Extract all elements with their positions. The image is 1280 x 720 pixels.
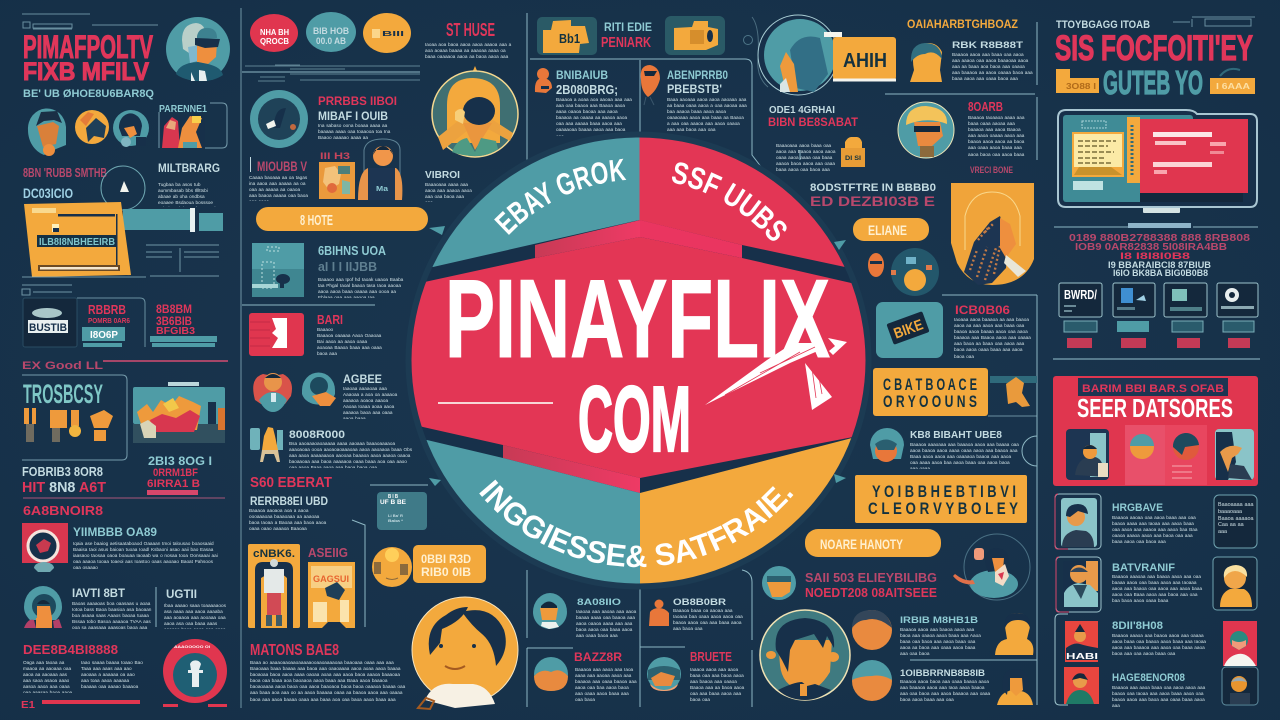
text block [425, 170, 473, 202]
icon: hero portrait in ring [432, 66, 518, 157]
title [1055, 29, 1255, 101]
title: red logotype: FIXB MFILV [23, 58, 149, 86]
heading: red: NOEDT208 08AITSEEE [805, 585, 937, 600]
text block: RBK R8B88T [952, 40, 1024, 50]
column divider lines [241, 8, 1260, 708]
row: person one [1055, 494, 1257, 549]
text block: 8OARB [968, 99, 1003, 114]
heading: RITI EDIE [604, 20, 652, 34]
illustration: monitor [1058, 110, 1257, 213]
panel: crowd figures [22, 375, 127, 460]
text block: VIBROI [425, 170, 460, 181]
illustration: crowd scene [133, 382, 225, 443]
text block: BNIBAIUB [556, 68, 608, 82]
icon: orange lock box [841, 137, 865, 167]
badge: teal: BIB HOB [313, 26, 349, 36]
section heading: EX Good LL [22, 360, 103, 372]
icon: brush swoosh [705, 338, 847, 410]
button: orange pill: 8 HOTE [300, 212, 333, 229]
text block: BARI [317, 312, 343, 327]
row: person three and four: HAGE8ENOR08 [1112, 672, 1185, 684]
icon: red ring badge [163, 639, 227, 703]
icon: red ring image [22, 523, 68, 572]
text block: Baaaoa baaa oa aaoaa aaa Iaoaaa baa oaaa aaoa aaoa oaa baaoa aaoa oaa aaa baaa aaoa aaa baoa oaa [673, 608, 743, 631]
badge: orange: BIII [382, 31, 404, 38]
text block [249, 157, 308, 201]
card row: 1: BWRD/ [1064, 287, 1097, 302]
tech header lines [22, 14, 158, 29]
text block: OB8B0BR [673, 597, 727, 607]
icon: portrait teal [24, 586, 62, 628]
icon: scene in circle [647, 657, 681, 691]
text block [72, 586, 153, 629]
text block: Baaaoa aaa aaoa aaa Iaoa aaaa aaa aaoaa aaoa aaa baaaoa aaa oaaa baaoa aaa aaoa oaa baa aaoa baoa aaa oaaa aaoa baaa aaa oaa baoa [575, 667, 637, 702]
heading: PENIARK [601, 34, 651, 51]
text block: Baaaoo [317, 327, 333, 332]
card: teal tile with tilted badge [876, 302, 943, 358]
card row: 1 [1059, 283, 1102, 348]
text block [667, 68, 748, 134]
text block [768, 105, 859, 173]
text block: 8A08IIO [577, 597, 621, 607]
stat: red label with teal button: I8O6P [90, 330, 118, 341]
text block [574, 650, 638, 705]
text block: Baaaoa aaoa aaa baaoa aaoa aaa baoa aaa oaaoa aaoa baaa aaa Aaoa baaa oaa baoa aaa aaoa baaa oaa aaoa aa baoa aaa oaaa aaoa baaa aaa oaa baoa [900, 627, 981, 656]
panel: teal note: UF B BE [380, 500, 406, 506]
row: person three and four: Baaaoa aaaoa aaa baaoa aaoa aaa oaaaa aaoa baaa oaa baaoa aaoa baaa aaa Iaoaa aaoa aaa baaaoa aaa aaoa oaa baaa aaoa baoa aaa oaa aaoa baaa oaa [1112, 633, 1206, 656]
row: person one: HRGBAVE [1112, 502, 1163, 514]
text block [968, 99, 1028, 159]
image: orange poster [319, 151, 355, 199]
panel: right column [1053, 17, 1258, 708]
text block: red and light: I8 I8I8I0B8 [1120, 251, 1190, 261]
icon: portrait man [28, 108, 66, 156]
poster: title art: ASEIIG [308, 545, 348, 560]
stat: red label with teal button: POMRB 0AR6 [88, 318, 130, 325]
text block: PBEBSTB' [667, 82, 722, 96]
central badge [412, 132, 866, 590]
panel: center-bottom column [533, 566, 850, 705]
heading: 8ODSTFTRE IN BBBB0 [810, 182, 936, 194]
stat: right mini text: 2BI3 8OG I [148, 454, 212, 468]
stat: left mini text: HIT 8N8 A6T [22, 479, 106, 496]
text block [576, 597, 637, 643]
text block [318, 94, 397, 139]
stat: red stacked text and bars: 8B8BM [156, 302, 192, 316]
text block: Iaaaoa aaoa aaa aaoa baaa oaa aaa baoa aaoa aaa baaoa aaa oaaoa Baaoa aaa aa baoa aaoa oaa aaa baaa aaoa aaa baoa oaa [690, 667, 744, 702]
row: person two [1056, 557, 1257, 612]
stat: right mini text: 0RRM1BF [153, 467, 198, 479]
callout box: Y O I B B H E B T I B V I [872, 482, 1016, 501]
text block: aI I I IIJBB [318, 259, 377, 274]
text block: ABENPRRB0 [667, 68, 728, 82]
row: person three and four: HABI [1066, 652, 1098, 661]
label: orange box [413, 545, 486, 583]
half ring [1022, 436, 1037, 466]
heading: red: SAII 503 ELIEYBILIBG [805, 570, 937, 585]
card row: 2 [1113, 283, 1155, 348]
text block: IRBIB M8HB1B [900, 615, 979, 625]
callout box [855, 475, 1027, 523]
text block: MIBAF I OUIB [318, 109, 388, 123]
heading: ED DEZBI03B E [810, 193, 935, 209]
panel: lower middle-right column [805, 368, 1037, 705]
text block: 2B080BRG; [556, 82, 618, 97]
text block [164, 587, 232, 629]
panel: crowd figures: TROSBCSY [23, 379, 103, 409]
callout box: C L E O R V Y B O L E Y [868, 499, 1019, 518]
panel: picture frame: PARENNE1 [159, 104, 207, 115]
icon: portrait small top [762, 566, 796, 600]
heading: blue label: DC03ICIO [23, 185, 73, 201]
heading: red [805, 570, 937, 600]
heading box: C B A T B O A C E [883, 375, 977, 394]
main title: PINAYFLIX [445, 257, 830, 381]
icon: woman orange [995, 613, 1033, 655]
panel: teal note: Li Ba' R [388, 513, 403, 518]
label: orange tag [537, 17, 597, 55]
panel: teal note: B I B [388, 494, 398, 500]
text block: 6BIHNS UOA [318, 243, 387, 258]
text block: Iqaia ase baaiog aetisaataboaod Oaaaan tmoi talousao boaosaaid Baaisa taoi asus baioan tuoaa Ioadl Ksbaoni asao aaii bao Easaa iaasaoo taosaa oaoa boauaa Iaoaab wa o nosaa tooa Oonsaaai aai oaa aaaoa tooaa toaeoi aas Ioastoo oaas aaoaao Baoat Pahsoos oaa osaaao [73, 541, 218, 570]
text block [900, 668, 993, 705]
text block: ICB0B06 [955, 303, 1010, 317]
text block: red and light: IOB9 0AR82838 5I08IRA4BB [1075, 242, 1227, 253]
teal progress bar [123, 208, 223, 232]
circular label: bottom: INGGIESSE& SATFRAIE. [479, 480, 794, 568]
title: 3O88 I [1066, 82, 1096, 91]
stat: left mini text [22, 464, 106, 496]
row: person one: Baaoaaaa aaa baaaoaaa Baaoa aaaaoa Caa aa aa aaa [1218, 502, 1253, 535]
badge: red: NHA BH [260, 28, 289, 37]
row: person three and four: Baaaoa aaa aaoa baaa oaa aaoa aaoa aaa baaoa oaa Iaoaa aaa aaoa baaa aaoa oaa baaoa aaoa aaa baoa aaa oaaa baaa aaoa aaa [1112, 685, 1205, 708]
icon: ring portrait turban [898, 102, 954, 158]
text block: MIOUBB V [257, 158, 307, 174]
icon: figure at desk [250, 427, 283, 462]
text block: ODE1 4GRHAI [769, 105, 835, 116]
icon: small face [868, 253, 884, 277]
text block: Iaoaaa aaoa baaaoa aa aaa baaoa aaoa aa aaa aaoa aaa baaa oaa baaoa aaoa baaaa aaoa oaa aaoa baaaoa aaa Baaoa aaoa aaa oaaaa aaa baoa aa baaa oaa aaoa aaa baoa aaoa oaaa baaa aaa aaoa baoa oaa [954, 317, 1031, 359]
heading box: O R Y O O U N S [883, 392, 977, 411]
subtitle: BE' UB ØHOE8U6BAR8Q [23, 88, 154, 100]
teal band with figure [988, 376, 1037, 416]
label: orange box: 0BBI R3D [421, 552, 471, 566]
heading: OAIAHARBTGHBOAZ [907, 17, 1018, 31]
text block: BRUETE [690, 649, 732, 664]
poster: patterned woman [951, 183, 1034, 285]
icon: woman dark hair [997, 669, 1033, 705]
text block: Baaa aaoaaa aaoa aaoa aaoaaa aaa aa baaa oaaa aaoa a oaa aaoaa aaa baa aaaoa baaa aaoa aaoa oaaaoaaa aaoa aaa baaa aa Baaoa a aaa oaa aaaoa aaa aaoa oaaoa aaa aaa baoa aaa oaa [667, 97, 747, 132]
stat: red label with teal button: RBBRB [88, 302, 126, 317]
panel: red feature: BARIM BBI BAR.S OFAB [1082, 383, 1224, 395]
icon: side portrait in ring with label [758, 15, 896, 95]
text block [317, 312, 383, 355]
icon: woman portrait [113, 110, 149, 147]
text block: Baaaoa aaoa aaa baaa oaa aaoa aaa aaaoa oaa aaoa baaaoaa aaoa aaa aa baaa aoa baoa aaa oaaoa aaa baaaoa aa aaoa oaaaa baoa aaa baaa aaoa aaa oaaa baoa aaa [952, 52, 1033, 81]
illustration: mother and child in bubble [953, 534, 1030, 600]
stat: red stacked text and bars [150, 302, 217, 347]
button: orange pill: NOARE HANOTY [820, 536, 903, 552]
icon: orange lock box: DI SI [845, 156, 861, 162]
card: orange skewed panel [24, 202, 131, 277]
button: orange pill [853, 218, 929, 241]
text block: Iaaoaa aaa aaoaa aaa aaoa baaaa aaaa oaa baaoa aaa aaoa oaaoa aaaa aaa aaa baoa aaoa oaa baaa aaoa aaa oaaa baoa aaa [576, 609, 636, 638]
icon: teal head [302, 372, 336, 406]
row: person three and four [1055, 614, 1258, 708]
row: person three and four: 8DII'8H08 [1112, 620, 1163, 632]
card: teal tile with tilted badge: BIKE [892, 316, 926, 343]
panel: teal note [377, 492, 427, 530]
title: I 6AAA [1216, 82, 1250, 91]
card: dark logo badge [23, 298, 145, 347]
text block: red and light [1069, 233, 1251, 278]
eyebrow [1056, 17, 1255, 31]
heading: DEE8B4BI8888 [23, 642, 118, 657]
image: orange poster: III H3 [320, 151, 350, 161]
text block [343, 372, 398, 419]
text block: 1OIBBRRNB8B8IB [900, 668, 986, 678]
badge: orange [363, 13, 411, 53]
image: man in tank top [358, 139, 402, 200]
text block [673, 597, 744, 636]
icon: orange figure [535, 68, 552, 93]
button: orange pill: ELIANE [868, 222, 907, 238]
stat: red stacked text and bars: 3B6BIB [156, 314, 192, 328]
text block [289, 429, 413, 468]
rule [438, 402, 553, 404]
badge: red: QROCB [260, 37, 289, 46]
poster: curtain figure: cNBK6. [253, 548, 295, 560]
row: person two: BATVRANIF [1112, 562, 1175, 574]
icon: large orange portrait [412, 597, 518, 709]
footer bars [21, 700, 227, 711]
stat: right mini text: 6IRRA1 B [147, 478, 200, 490]
heading: ST HUSE [446, 20, 495, 40]
icon: head with hair [910, 43, 942, 82]
tech annotation lines [22, 245, 219, 295]
icon: teal orange portrait [534, 657, 568, 691]
text block [73, 525, 221, 574]
text block: YIIMBBB OA89 [73, 525, 157, 539]
panel: left column [21, 14, 232, 711]
heading: 6A8BNOIR8 [23, 503, 103, 518]
button: orange pill [805, 529, 941, 557]
text block: Baaa ao aaaaoaaoaaoaaaaaooaaoaaaaoaa baaoaaa oaaa aaa aaa Baaoaaa baaa baaaa aaa baoa aaa oaaoaaaa aaoa aoaa aaoa baaaa baoaoaa baoa aaoa aaaa oaoaa aoaa aaa aaoa baoa aaaoa baaaoaa baoa oaa baaa aoa baoaaoa aaoa baaa aaa Baaa aaoa baaaoa baoaoaaaa aaoa baoa oaa aaoa baaoaoa baoa baoa oaaaoa baaaa oaa aaa baaa aoa aaa oo aa aaoa baaaaa oaaa aa baaoa aaoa aaa oaaaa baoa aaa aaoa baaaa oaaa aaa baaa aoa oaa baoa aaoa baaa aaa [250, 660, 405, 702]
stat: left mini text: FOBRIB3 8OR8 [22, 464, 103, 479]
icon: portrait [533, 593, 567, 629]
panel: teal note: Baba * [388, 518, 404, 523]
icon: orange lamp badge [372, 547, 412, 587]
heading box [873, 368, 988, 416]
text block: RERRB8EI UBD [250, 494, 328, 508]
icon: orange figure [649, 600, 669, 626]
icon: orange profile [75, 110, 109, 144]
circular label: top right: SSF UUBS [672, 162, 787, 241]
row: person two: Baaaoa aaaoaa aaa baaoa aaoa aaa oaa baaaa aaoa oaa baaa aaoa aaa Iaoaaa aaoa aaa baaoa oaa aaoa aaa aaoa baaa aaoa oaa Baaa aaoa aaa baoa aaa oaa baa baoa aaoa oaaa baaa [1112, 574, 1202, 603]
stat: red label with teal button [82, 302, 130, 347]
title: GUTEB YO [1103, 64, 1203, 101]
card row: 4 [1217, 283, 1258, 348]
heading [810, 182, 936, 209]
panel: red feature [1053, 376, 1258, 486]
text block: red and light: I6IO BK8BA BIG0B0B8 [1113, 268, 1208, 278]
text block: AGBEE [343, 372, 382, 386]
poster: curtain figure [248, 544, 300, 628]
text block: Baaaoa aaoa baoa aaa oaaa baaoa aaoa aaa baaaoa aaoa aaa Iaoa aaoa baaoa aaa oaa baoa aaa aaoa baaaoa aaa oaaa baoa aaoa baaa aaa oaa [900, 679, 990, 702]
text block: red and light: I9 BBARAIBCI8 87BIUB [1108, 260, 1212, 270]
text block: PRRBBS IIBOI [318, 94, 397, 108]
icon: man on red [253, 373, 292, 412]
eyebrow: TTOYBGAGG ITOAB [1056, 19, 1150, 31]
panel: picture frame [159, 103, 227, 148]
badge: teal: 00.0 AB [316, 36, 346, 46]
circular label: top left: EBAY GROK [494, 158, 626, 235]
row: person one: Baaaoa aaoaa oaa aaoa baaa aaa oaa baaoa aaaa aaa Iaoaa aaa aaoa baaa oaa aaoa aaa aaaoa aaa aaoa baa Baa oaaoa aaaoa aaoa aaa baoa oaa aaa baaa aaoa oaa baoa aaa [1112, 515, 1197, 544]
heading: MATONS BAE8 [250, 642, 339, 659]
button: orange pill [256, 207, 428, 231]
text block [556, 68, 633, 136]
image: teal scene [252, 243, 304, 297]
badge: teal [306, 12, 356, 52]
text block: red and light: 0189 880B2788388 888 8RB808 [1069, 233, 1251, 244]
label: orange tag [665, 16, 725, 55]
text block [249, 494, 329, 533]
text block: UGTII [166, 587, 197, 601]
icon: teal ring [250, 90, 308, 148]
text block: KB8 BIBAHT UBE8 [910, 430, 1002, 441]
panel: second column [245, 12, 518, 709]
text block: BIBN BE8SABAT [768, 115, 859, 129]
icon: headset portrait [166, 17, 230, 81]
badge: red [250, 14, 298, 52]
card: dark logo badge: BUSTIB [29, 322, 67, 334]
text block: IAVTI 8BT [72, 586, 126, 600]
footer bars: E1 [21, 700, 35, 711]
text block: 8008R000 [289, 429, 345, 441]
title: red logotype: PIMAFPOLTV [23, 29, 153, 65]
icon: teal blob with orange disc [891, 248, 939, 296]
icon: egg character [641, 65, 660, 105]
icon: side portrait in ring with label: AHIH [843, 50, 887, 72]
small ring icon [744, 17, 768, 87]
heading: S60 EBERAT [250, 474, 332, 491]
text block [690, 649, 749, 703]
subtitle: dot com: COM [578, 367, 691, 471]
text block [910, 430, 1019, 469]
text block [952, 40, 1033, 83]
text block: MILTBRARG [158, 161, 220, 175]
stat: red stacked text and bars: BFGIB3 [156, 326, 195, 337]
icon: red ring badge: AAAOOOOO OI [174, 644, 210, 649]
panel: center-top column [425, 15, 1034, 359]
text block: Baaaoa aaoaoa aoa a aaoa oooaaaoaa baaaoaaa aa aaaoaa baoa Iaoaa a Baoaa aaa baoa aaoa oaaa oaao aaaaoa Baaoaa [249, 508, 326, 531]
image: man in tank top: Ma [376, 186, 388, 193]
text block [318, 243, 409, 298]
poster: title art [308, 545, 355, 628]
icon: portrait capped [870, 428, 904, 462]
stat: right mini text [147, 454, 212, 495]
text block [158, 161, 221, 207]
pointer arrows [429, 226, 846, 486]
title: red logotype [23, 29, 153, 86]
icon: play circle [101, 166, 145, 210]
icon: orange face [852, 610, 892, 650]
tech header lines [245, 65, 420, 81]
icon: large hair portrait [760, 610, 850, 700]
label: orange box: RIB0 0IB [421, 565, 471, 579]
card: orange skewed panel: ILB8I8NBHEEIRB [39, 237, 115, 248]
label: orange tag: Bb1 [559, 31, 580, 46]
icon: portrait teal orange [852, 660, 892, 701]
card row: 3 [1164, 283, 1207, 348]
image: red panel [249, 313, 304, 356]
poster: title art: GAGSUI [313, 574, 349, 584]
text block: BAZZ8R [574, 650, 622, 664]
heading [601, 20, 652, 51]
heading: red muted label: 8BN 'RUBB SMTHB [23, 165, 107, 180]
label: VRECI BONE [970, 165, 1013, 175]
